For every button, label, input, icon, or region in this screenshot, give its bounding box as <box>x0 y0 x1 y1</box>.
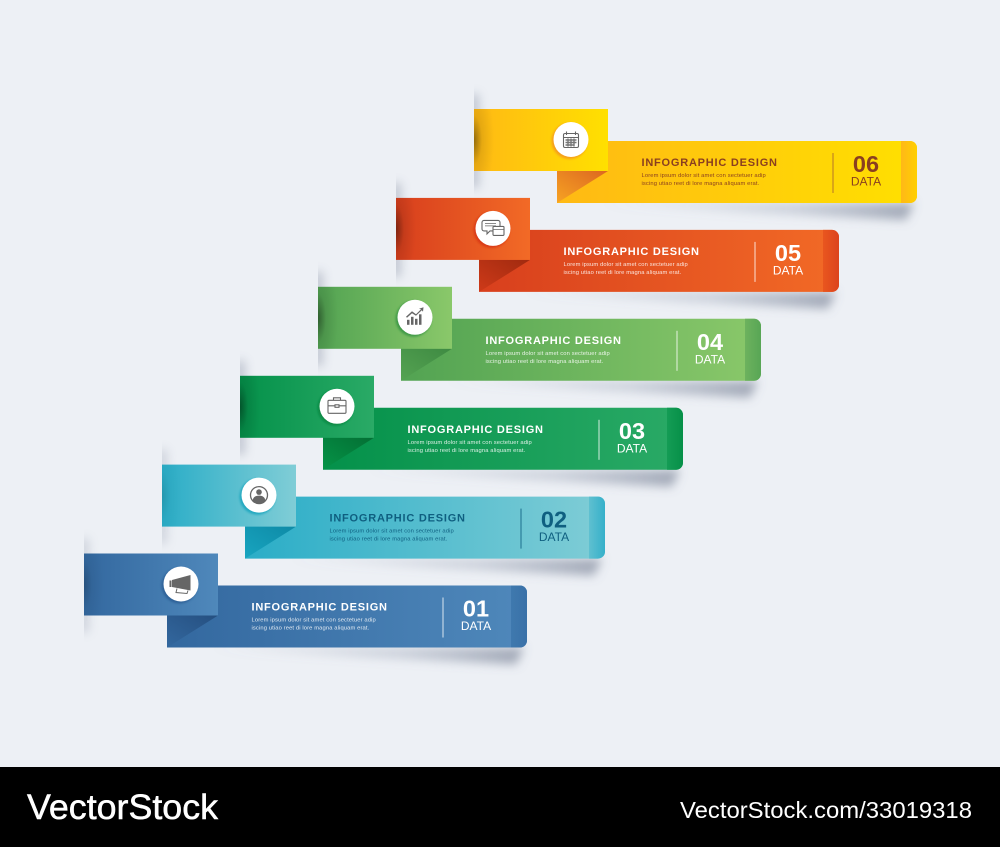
text block 03: iscing utiao reet di lore magna aliquam erat. <box>408 448 526 454</box>
flap 05 <box>396 198 530 260</box>
text block 04: INFOGRAPHIC DESIGN <box>486 335 622 347</box>
band cap 03 <box>667 408 683 470</box>
panel: step 05 <box>390 183 839 309</box>
data 06: 06 <box>853 151 879 177</box>
shadow under band 04 <box>444 381 758 398</box>
text block 05: iscing utiao reet di lore magna aliquam erat. <box>564 270 682 276</box>
data 06 <box>851 151 881 188</box>
flap 01 <box>84 554 218 616</box>
text block 06 <box>642 157 778 187</box>
text block 02: INFOGRAPHIC DESIGN <box>330 513 466 525</box>
band cap 02 <box>589 497 605 559</box>
band cap 04 <box>745 319 761 381</box>
icon circle 04: growth chart <box>396 300 432 337</box>
icon circle 02: person <box>240 478 276 515</box>
flap 06 <box>474 109 608 171</box>
shadow under band 01 <box>210 648 524 664</box>
data 04 <box>695 329 725 366</box>
shadow under band 02 <box>288 559 602 576</box>
data 03: DATA <box>617 441 647 455</box>
text block 01 <box>252 598 444 638</box>
panel: step 06 <box>468 94 917 220</box>
band 04 <box>401 319 761 381</box>
text block 02: Lorem ipsum dolor sit amet con sectetuer adip <box>330 529 454 535</box>
data 05 <box>773 240 803 277</box>
data 03 <box>617 418 647 455</box>
fold 01 <box>167 616 218 648</box>
text block 02 <box>330 509 522 549</box>
data 01 <box>461 596 491 633</box>
text block 05 <box>564 242 756 282</box>
panel: step 02 <box>156 450 605 576</box>
flap 02 <box>162 465 296 527</box>
data 02 <box>539 507 569 544</box>
fold 05 <box>479 260 530 292</box>
data 02: DATA <box>539 530 569 544</box>
text block 04: iscing utiao reet di lore magna aliquam erat. <box>486 359 604 365</box>
text block 05: Lorem ipsum dolor sit amet con sectetuer adip <box>564 262 688 268</box>
footer logo: VectorStock <box>27 788 219 827</box>
data 03: 03 <box>619 418 645 444</box>
icon circle 03: briefcase <box>318 389 354 426</box>
band cap 06 <box>901 141 917 203</box>
fold 04 <box>401 349 452 381</box>
text block 02: iscing utiao reet di lore magna aliquam erat. <box>330 537 448 543</box>
panel: step 03 <box>234 361 683 487</box>
shadow behind flap 02 <box>162 448 170 546</box>
text block 03: INFOGRAPHIC DESIGN <box>408 424 544 436</box>
data 04: 04 <box>697 329 723 355</box>
icon circle 05: chat <box>474 211 510 248</box>
band 05 <box>479 230 839 292</box>
text block 03: Lorem ipsum dolor sit amet con sectetuer adip <box>408 440 532 446</box>
flap 04 <box>318 287 452 349</box>
band 02 <box>245 497 605 559</box>
band 06 <box>557 141 917 203</box>
shadow behind flap 06 <box>468 94 479 188</box>
shadow under band 05 <box>522 292 836 309</box>
data 01: 01 <box>463 596 489 622</box>
band cap 01 <box>511 586 527 648</box>
text block 06: Lorem ipsum dolor sit amet con sectetuer adip <box>642 173 766 179</box>
text block 04 <box>486 331 678 371</box>
band 01 <box>167 586 527 648</box>
fold 06 <box>557 171 608 203</box>
data 02: 02 <box>541 507 567 533</box>
text block 03 <box>408 420 600 460</box>
panel: step 01 <box>78 538 527 664</box>
shadow behind flap 05 <box>390 183 401 277</box>
text block 06: iscing utiao reet di lore magna aliquam erat. <box>642 181 760 187</box>
data 06: DATA <box>851 174 881 188</box>
shadow under band 06 <box>600 203 914 220</box>
icon circle 01: megaphone <box>162 566 198 604</box>
data 05: DATA <box>773 263 803 277</box>
data 01: DATA <box>461 619 491 633</box>
data 04: DATA <box>695 352 725 366</box>
band 03 <box>323 408 683 470</box>
panel: step 04 <box>312 272 761 398</box>
shadow behind flap 04 <box>312 272 323 366</box>
shadow under band 03 <box>366 470 680 487</box>
band cap 05 <box>823 230 839 292</box>
footer url: VectorStock.com/33019318 <box>680 797 972 823</box>
shadow behind flap 01 <box>84 537 92 634</box>
text block 04: Lorem ipsum dolor sit amet con sectetuer adip <box>486 351 610 357</box>
text block 05: INFOGRAPHIC DESIGN <box>564 246 700 258</box>
text block 01: Lorem ipsum dolor sit amet con sectetuer adip <box>252 618 376 624</box>
data 05: 05 <box>775 240 801 266</box>
fold 03 <box>323 438 374 470</box>
text block 01: iscing utiao reet di lore magna aliquam erat. <box>252 626 370 632</box>
text block 06: INFOGRAPHIC DESIGN <box>642 157 778 169</box>
fold 02 <box>245 527 296 559</box>
text block 01: INFOGRAPHIC DESIGN <box>252 602 388 614</box>
shadow behind flap 03 <box>234 361 245 455</box>
footer bar <box>0 767 1000 847</box>
icon circle 06: calendar <box>552 122 588 159</box>
flap 03 <box>240 376 374 438</box>
